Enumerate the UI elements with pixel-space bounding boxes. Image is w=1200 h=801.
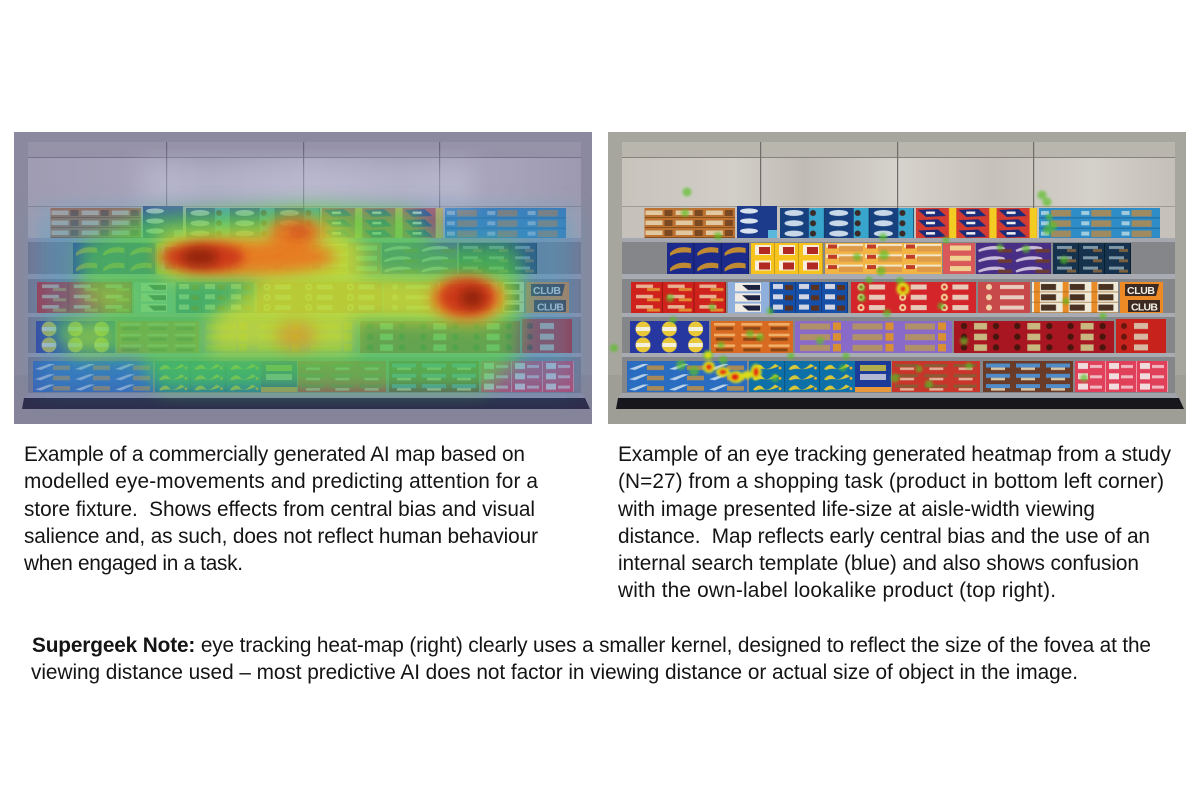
- label: CLUB packs: CLUB: [1131, 302, 1158, 314]
- caption: AI map: salience and, as such, does not reflect human behaviour: [24, 525, 538, 548]
- heat map: darkest peaks: [182, 248, 484, 308]
- caption: eye tracking map: with the own-label lookalike product (top right).: [617, 579, 1056, 602]
- heat map: red hot zones: [164, 225, 495, 315]
- heat map: orange hot zones: [156, 217, 503, 351]
- caption: eye tracking map: [617, 443, 1172, 602]
- label: CLUB packs: CLUB: [533, 285, 561, 297]
- caption: AI map: [23, 443, 538, 575]
- heat map: green fixation dots: [610, 188, 1106, 388]
- label: CLUB packs: [1127, 287, 1158, 310]
- panel: AI predicted attention map: [14, 132, 592, 424]
- caption: eye tracking map: distance. Map reflects early central bias and the use of an: [618, 525, 1150, 548]
- caption: AI map: modelled eye-movements and predicting attention for a: [24, 470, 538, 493]
- heat map: yellow attention zone: [64, 222, 514, 352]
- caption: eye tracking map: Example of an eye tracking generated heatmap from a study: [618, 443, 1172, 466]
- caption: eye tracking map: internal search template (blue) and also shows confusion: [618, 552, 1139, 575]
- heat map: green attention zone: [49, 204, 524, 390]
- label: CLUB packs: [533, 287, 564, 310]
- heat map: red fixation peaks: [706, 287, 905, 380]
- heat map: yellow fixation halos: [703, 282, 910, 383]
- blue tint overlay: [14, 132, 592, 424]
- label: CLUB packs: CLUB: [1127, 285, 1155, 297]
- note: Supergeek: [31, 634, 1151, 684]
- heat map: broad low-attention wash: [39, 212, 574, 390]
- label: CLUB packs: CLUB: [537, 302, 564, 314]
- caption: AI map: when engaged in a task.: [23, 552, 243, 575]
- caption: AI map: store fixture. Shows effects from central bias and visual: [24, 498, 535, 521]
- panel: eye tracking heatmap: [608, 132, 1186, 424]
- note: Supergeek: Supergeek Note: eye tracking heat-map (right) clearly uses a smaller kernel, designed to reflect the size of the fovea at the: [32, 634, 1151, 657]
- caption: eye tracking map: (N=27) from a shopping task (product in bottom left corner): [618, 470, 1164, 493]
- caption: AI map: Example of a commercially generated AI map based on: [24, 443, 525, 466]
- pale glow on back wall: [144, 162, 474, 206]
- caption: eye tracking map: with image presented life-size at aisle-width viewing: [617, 498, 1095, 521]
- note: Supergeek: viewing distance used – most predictive AI does not factor in viewing distance or actual size of object in the image.: [31, 661, 1078, 684]
